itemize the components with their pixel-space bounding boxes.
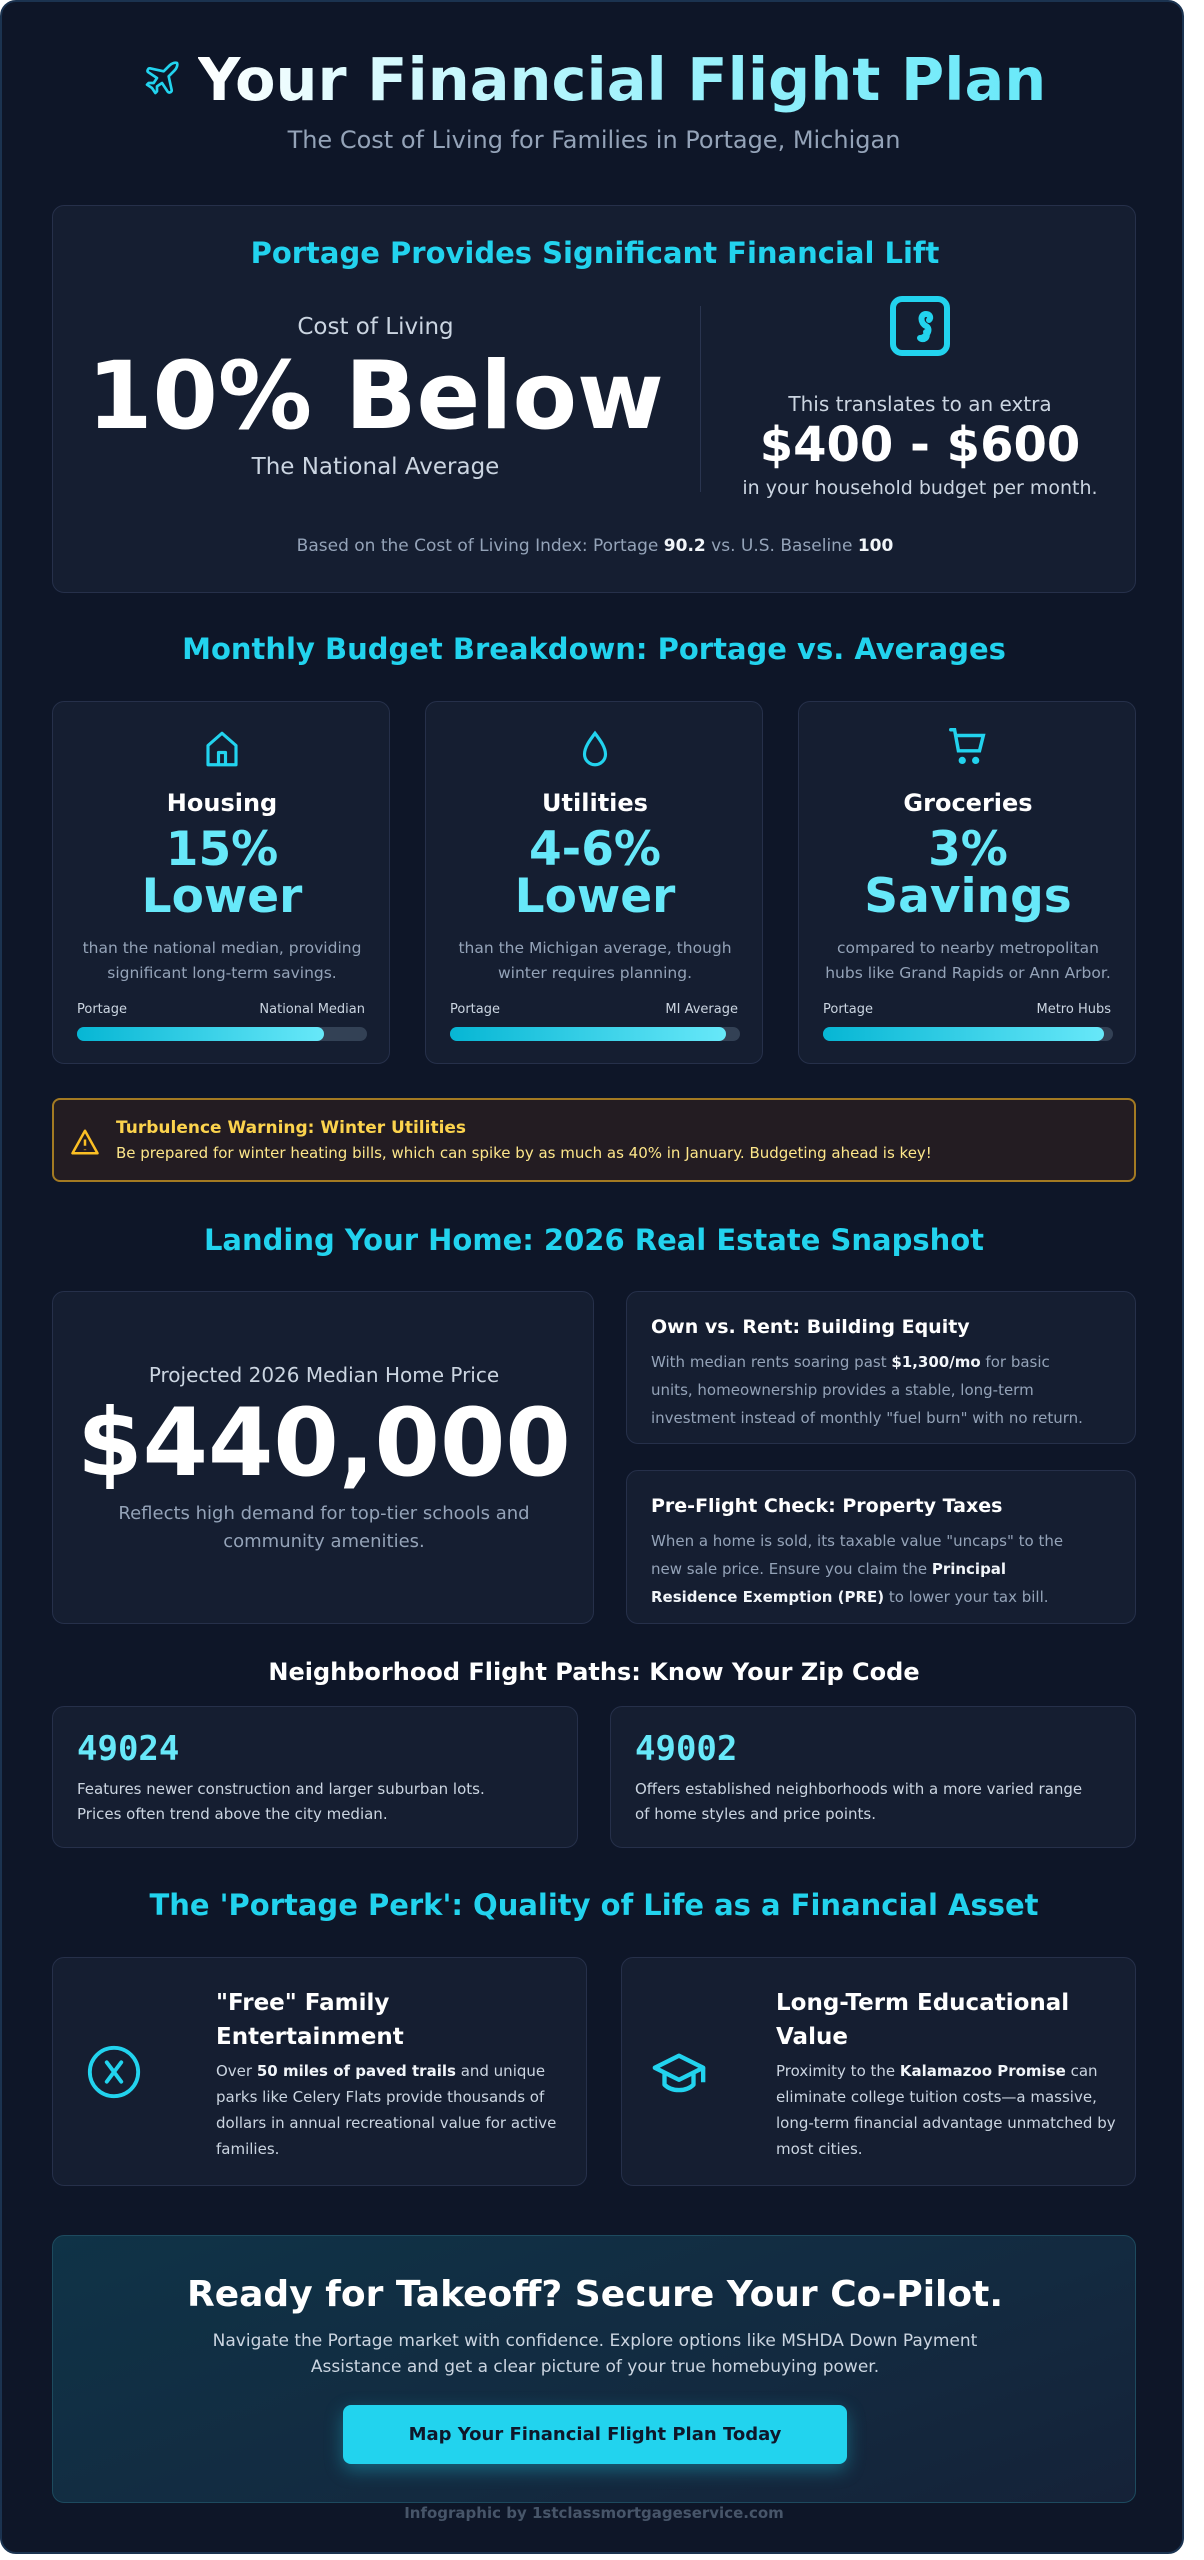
panel: property taxes: When a home is sold, its taxable value "uncaps" to the	[651, 1532, 1063, 1550]
stat: extra budget: $400 - $600	[760, 417, 1080, 473]
heading: zip codes: Neighborhood Flight Paths: Know Your Zip Code	[268, 1658, 920, 1686]
card: utilities: 4-6%	[529, 822, 661, 877]
panel: median price	[52, 1291, 594, 1624]
panel: own vs rent: investment instead of monthly "fuel burn" with no return.	[651, 1409, 1083, 1427]
card: groceries: Savings	[864, 869, 1072, 924]
card: housing: Lower	[142, 869, 302, 924]
panel: own vs rent: Own vs. Rent: Building Equity	[651, 1316, 970, 1338]
card: housing: than the national median, providing	[83, 939, 361, 957]
card: housing: significant long-term savings.	[107, 964, 337, 982]
card: housing: Portage	[77, 1002, 127, 1017]
icon: house	[206, 732, 238, 766]
card: utilities: Lower	[515, 869, 675, 924]
card: housing: National Median	[259, 1002, 365, 1017]
heading: portage perk: The 'Portage Perk': Quality of Life as a Financial Asset	[149, 1888, 1039, 1922]
card: groceries: Portage	[823, 1002, 873, 1017]
title: Your Financial Flight Plan	[198, 45, 1046, 114]
panel: call to action: Navigate the Portage market with confidence. Explore options like MSHDA Down Payment	[213, 2331, 977, 2351]
card: 49002: Offers established neighborhoods with a more varied range	[635, 1780, 1082, 1798]
card: utilities	[425, 701, 763, 1064]
stat: 10% below: Cost of Living	[297, 314, 454, 340]
card: utilities: winter requires planning.	[498, 964, 692, 982]
card: family entertainment	[52, 1957, 587, 2186]
card: education	[621, 1957, 1136, 2186]
card: housing	[52, 701, 390, 1064]
subtitle: The Cost of Living for Families in Portage, Michigan	[288, 126, 900, 154]
callout: turbulence warning	[52, 1098, 1136, 1182]
panel: own vs rent: With median rents soaring past $1,300/mo for basic	[651, 1353, 1050, 1371]
card: family entertainment: families.	[216, 2140, 279, 2158]
card: groceries: 3%	[928, 822, 1008, 877]
card: utilities: Utilities	[542, 789, 648, 817]
card: education: Long-Term Educational	[776, 1990, 1069, 2016]
panel: financial lift	[52, 205, 1136, 593]
stat: 10% below: 10% Below	[87, 342, 664, 451]
footer: Infographic by 1stclassmortgageservice.com	[404, 2504, 784, 2522]
panel: own vs rent: units, homeownership provides a stable, long-term	[651, 1381, 1034, 1399]
card: family entertainment: dollars in annual recreational value for active	[216, 2114, 556, 2132]
icon: circle x	[88, 2046, 140, 2098]
stat: 10% below	[87, 314, 664, 480]
icon: graduation cap	[652, 2054, 706, 2092]
card: family entertainment: Over 50 miles of paved trails and unique	[216, 2062, 545, 2080]
callout: turbulence warning: Turbulence Warning: Winter Utilities	[116, 1118, 466, 1138]
card: education: Value	[776, 2024, 848, 2050]
card: groceries: hubs like Grand Rapids or Ann Arbor.	[825, 964, 1111, 982]
card: family entertainment: Entertainment	[216, 2024, 404, 2050]
callout: turbulence warning: Be prepared for winter heating bills, which can spike by as much as 40% in January. Budgeting ahead is key!	[116, 1144, 932, 1162]
card: groceries: Metro Hubs	[1036, 1002, 1111, 1017]
button	[343, 2405, 847, 2464]
card: utilities: than the Michigan average, though	[458, 939, 732, 957]
footnote: Based on the Cost of Living Index: Portage 90.2 vs. U.S. Baseline 100	[297, 536, 893, 556]
panel: property taxes: new sale price. Ensure you claim the Principal	[651, 1560, 1006, 1578]
icon: warning	[71, 1130, 99, 1154]
panel: call to action: Ready for Takeoff? Secure Your Co-Pilot.	[187, 2274, 1003, 2315]
card: 49002	[610, 1706, 1136, 1848]
icon: airplane	[146, 61, 179, 94]
panel: property taxes: Residence Exemption (PRE) to lower your tax bill.	[651, 1588, 1049, 1606]
card: education: long-term financial advantage unmatched by	[776, 2114, 1116, 2132]
heading: real estate: Landing Your Home: 2026 Real Estate Snapshot	[204, 1223, 984, 1257]
card: groceries: Groceries	[903, 789, 1033, 817]
icon: cart	[949, 728, 986, 764]
panel: call to action	[52, 2235, 1136, 2503]
card: education: Proximity to the Kalamazoo Promise can	[776, 2062, 1098, 2080]
panel: median price: community amenities.	[223, 1531, 425, 1552]
card: 49024: 49024	[77, 1729, 179, 1769]
card: groceries	[798, 701, 1136, 1064]
panel: median price: $440,000	[77, 1389, 571, 1498]
card: 49024	[52, 1706, 578, 1848]
stat: extra budget	[742, 296, 1098, 499]
stat: extra budget: in your household budget per month.	[742, 477, 1098, 499]
panel: median price: Reflects high demand for top-tier schools and	[118, 1503, 530, 1524]
panel: property taxes	[626, 1470, 1136, 1624]
card: 49002: of home styles and price points.	[635, 1805, 876, 1823]
button: Map Your Financial Flight Plan Today	[409, 2424, 781, 2445]
card: family entertainment: "Free" Family	[216, 1990, 389, 2016]
panel: median price: Projected 2026 Median Home Price	[149, 1363, 499, 1387]
card: 49024: Features newer construction and larger suburban lots.	[77, 1780, 485, 1798]
icon: wallet	[890, 296, 950, 356]
panel: call to action: Assistance and get a clear picture of your true homebuying power.	[311, 2357, 879, 2377]
panel: property taxes: Pre-Flight Check: Property Taxes	[651, 1495, 1002, 1517]
heading: financial lift: Portage Provides Significant Financial Lift	[251, 236, 939, 270]
card: housing: 15%	[166, 822, 278, 877]
icon: drop	[582, 730, 608, 766]
card: family entertainment: parks like Celery Flats provide thousands of	[216, 2088, 544, 2106]
stat: extra budget: This translates to an extra	[788, 392, 1052, 416]
card: education: eliminate college tuition costs—a massive,	[776, 2088, 1097, 2106]
card: utilities: Portage	[450, 1002, 500, 1017]
card: utilities: MI Average	[665, 1002, 738, 1017]
card: education: most cities.	[776, 2140, 863, 2158]
card: housing: Housing	[167, 789, 277, 817]
heading: monthly budget: Monthly Budget Breakdown: Portage vs. Averages	[182, 632, 1006, 666]
card: 49024: Prices often trend above the city median.	[77, 1805, 388, 1823]
card: 49002: 49002	[635, 1729, 737, 1769]
card: groceries: compared to nearby metropolitan	[837, 939, 1099, 957]
stat: 10% below: The National Average	[252, 454, 499, 480]
panel: own vs rent	[626, 1291, 1136, 1444]
